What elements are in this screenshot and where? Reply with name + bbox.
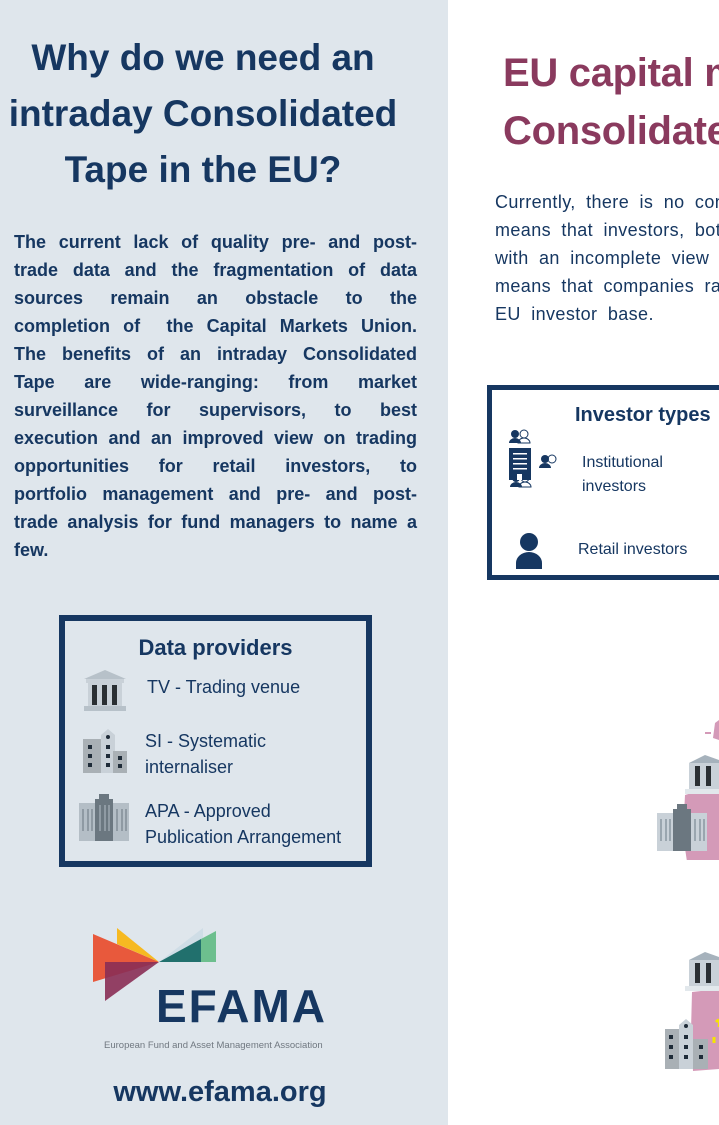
icon: APA	[657, 804, 707, 851]
text: retail: Retail investors	[578, 541, 687, 558]
text block: intro: surveillance for supervisors, to best	[14, 400, 417, 420]
icon: systematic internaliser	[83, 729, 127, 773]
text: APA: Publication Arrangement	[145, 827, 341, 847]
map: lower region	[665, 952, 719, 1071]
text block: intro: The current lack of quality pre- and post-	[14, 232, 417, 252]
text block: intro: trade data and the fragmentation of data	[14, 260, 417, 280]
text: association name: European Fund and Asset Management Association	[104, 1040, 323, 1051]
logo: EFAMA	[93, 928, 327, 1051]
icon: logo triangles	[93, 928, 216, 1001]
text block: intro: trade analysis for fund managers to name a	[14, 512, 417, 532]
text: institutional: Institutional	[582, 454, 663, 471]
heading: data providers: Data providers	[138, 635, 293, 660]
icon: trading venue	[84, 670, 126, 711]
panel: data providers	[59, 615, 372, 867]
icon: APA	[79, 794, 129, 841]
text block: intro: sources remain an obstacle to the	[14, 288, 417, 308]
text block: intro: Tape are wide-ranging: from market	[14, 372, 417, 392]
icon: systematic internaliser	[665, 1019, 708, 1069]
text block: intro: completion of the Capital Markets Union.	[14, 316, 417, 336]
heading: investor types: Investor types	[575, 404, 711, 426]
text: SI: internaliser	[145, 757, 233, 777]
text block: currently	[495, 192, 719, 324]
panel: left background	[0, 0, 448, 1125]
text block: intro: few.	[14, 540, 48, 560]
text block: currently: EU investor base.	[495, 304, 654, 324]
title: why: Why do we need an intraday Consolidated Tape in the EU?	[9, 37, 397, 190]
text: APA	[145, 801, 341, 847]
text: SI: SI - Systematic	[145, 731, 266, 751]
map: upper region	[657, 720, 719, 860]
icon: trading venue	[685, 952, 719, 991]
icon: institutional	[509, 430, 556, 488]
panel: investor types	[487, 385, 719, 580]
text block: intro: opportunities for retail investors, to	[14, 456, 417, 476]
text: EFAMA: EFAMA	[156, 980, 327, 1032]
text block: intro: execution and an improved view on trading	[14, 428, 417, 448]
text: APA: APA - Approved	[145, 801, 271, 821]
panel: right column	[487, 51, 719, 1071]
text block: intro: The benefits of an intraday Consolidated	[14, 344, 417, 364]
text: institutional	[582, 454, 663, 495]
text block: intro	[14, 232, 418, 560]
text: institutional: investors	[582, 478, 646, 495]
text: SI	[145, 731, 266, 777]
text: website: www.efama.org	[113, 1076, 327, 1108]
text block: intro: portfolio management and pre- and post-	[14, 484, 417, 504]
icon: trading venue	[685, 755, 719, 794]
title: EU capital markets	[503, 51, 719, 153]
icon: retail	[516, 533, 542, 569]
text: TV: TV - Trading venue	[147, 677, 300, 697]
